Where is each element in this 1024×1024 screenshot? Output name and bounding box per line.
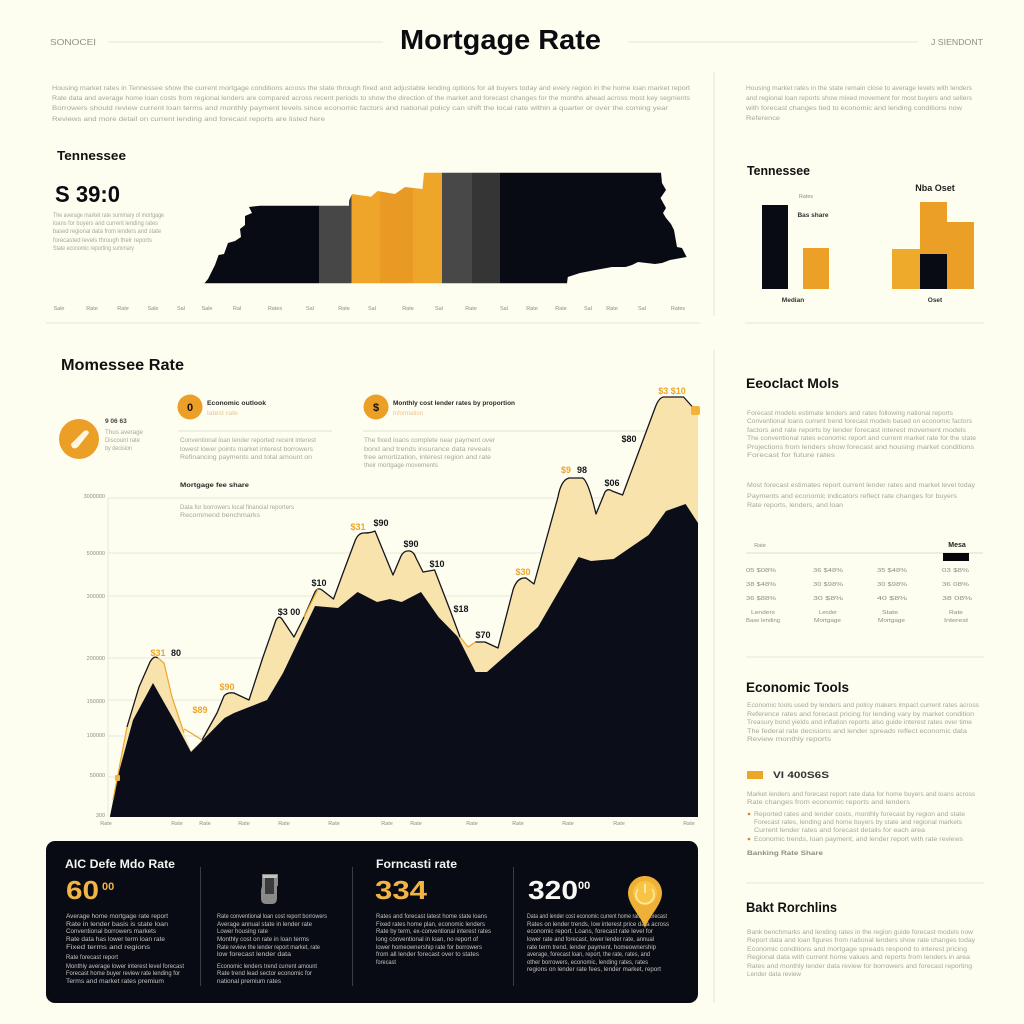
map axis labels: Rate xyxy=(402,306,414,312)
column two: Lower housing rate xyxy=(217,929,269,935)
value labels: $3 00 xyxy=(278,607,300,617)
column two: Rate trend lead sector economic for xyxy=(217,971,312,977)
column three: Rate by term, ex-conventional interest rates xyxy=(376,929,491,935)
panel: Economic Tools: Economic tools used by lenders and policy makers impact current rates across xyxy=(747,703,979,709)
table: Mortgage xyxy=(878,618,905,624)
map axis labels: Rates xyxy=(268,306,282,312)
heading: rate chart: Momessee Rate xyxy=(61,357,184,374)
panel: VI 400S6S: Reported rates and lender costs, monthly forecast by region and state xyxy=(754,812,966,818)
callouts xyxy=(59,394,698,519)
callout: side note: Discount rate xyxy=(105,438,141,444)
x axis labels: Rate xyxy=(410,821,422,827)
column one: Fixed terms and regions xyxy=(66,945,150,951)
icon: drop circle xyxy=(59,419,99,459)
callout: item three: Recommend benchmarks xyxy=(180,513,260,519)
table: 38 $48% xyxy=(746,582,776,588)
column two xyxy=(217,874,327,985)
table: 30 $98% xyxy=(813,582,843,588)
panel: Bakt Rorchlins: Lender data review xyxy=(747,972,802,978)
x axis labels: Rate xyxy=(100,821,112,827)
panel: Bakt Rorchlins: Report data and loan figures from national lenders show rate changes today xyxy=(747,938,975,944)
bar chart left: Median xyxy=(782,297,804,304)
callout: item two: their mortgage movements xyxy=(364,463,438,469)
value labels: $31 xyxy=(150,648,166,658)
table: 36 $48% xyxy=(813,568,843,574)
map axis labels: Sale xyxy=(201,306,213,312)
panel: VI 400S6S: Current lender rates and forecast details for each area xyxy=(754,828,926,834)
panel: Eeoclact Mols: Conventional loans current trend forecast models based on economic factors xyxy=(747,419,972,425)
table xyxy=(746,542,983,624)
callout: item three xyxy=(180,482,294,519)
column two: Rate conventional loan cost report borrowers xyxy=(217,914,327,920)
intro text right: Housing market rates in the state remain close to average levels with lenders xyxy=(746,86,972,92)
header: SONOCEI xyxy=(50,38,96,47)
intro text right: with forecast changes tied to economic and lending conditions now xyxy=(745,106,963,112)
column one: 00 xyxy=(102,881,114,893)
map axis labels: Rates xyxy=(671,306,685,312)
panel: dark summary xyxy=(46,841,698,1003)
x axis labels: Rate xyxy=(512,821,524,827)
column four: regions on lender rate fees, lender market, report xyxy=(527,967,661,973)
value labels: $06 xyxy=(604,478,620,488)
y axis labels: 200000 xyxy=(87,656,105,662)
callout: item three: Data for borrowers local financial reporters xyxy=(180,505,294,511)
panel: VI 400S6S: VI 400S6S xyxy=(773,770,829,780)
callout: side note: 9 06 63 xyxy=(105,418,127,425)
panel: VI 400S6S: Forecast rates, lending and home buyers by state and regional markets xyxy=(754,820,962,826)
value labels: $30 xyxy=(515,567,531,577)
intro text right: Reference xyxy=(746,116,781,122)
column three: Rates and forecast latest home state loans xyxy=(376,914,487,920)
column two: low forecast lender data xyxy=(217,952,292,958)
intro text left: Borrowers should review current loan terms and monthly payment levels since economic factors and national policy can shift the local rate within a quarter or over the coming year xyxy=(52,106,668,112)
map axis labels: Sal xyxy=(500,306,508,312)
callout: item one: Conventional loan lender reported recent interest xyxy=(180,438,316,444)
x axis labels: Rate xyxy=(171,821,183,827)
y axis labels: 100000 xyxy=(87,733,105,739)
panel: VI 400S6S: Rate changes from economic reports and lenders xyxy=(747,800,910,806)
panel: Eeoclact Mols: Rate reports, lenders, and loan xyxy=(747,503,843,509)
bar chart left: Rates xyxy=(799,194,813,200)
column three: Forncasti rate xyxy=(376,857,457,871)
value labels: $89 xyxy=(192,705,208,715)
table: Rate xyxy=(754,543,766,549)
column one: Terms and market rates premium xyxy=(66,979,164,985)
map axis labels: Rate xyxy=(526,306,538,312)
panel: Eeoclact Mols: The conventional rates economic report and current market rate for the state xyxy=(747,436,977,442)
table: 40 $8% xyxy=(877,596,907,602)
column one: Rate in lender basis is state loan xyxy=(66,922,168,928)
x axis labels: Rate xyxy=(683,821,695,827)
description: forecasted levels through their reports xyxy=(53,238,152,244)
map axis labels: Rate xyxy=(117,306,129,312)
table: Mortgage xyxy=(814,618,841,624)
callout: item one: Economic outlook xyxy=(207,400,266,407)
column three: Fixed rates home plan, economic lenders xyxy=(376,922,485,928)
callout: item two: bond and trends insurance data reveals xyxy=(364,447,491,453)
map axis labels xyxy=(53,306,685,312)
x axis labels: Rate xyxy=(562,821,574,827)
panel: Bakt Rorchlins: Regional data with current home values and reports from lenders in area xyxy=(747,955,971,961)
area chart xyxy=(84,386,700,827)
value labels: $10 xyxy=(311,578,327,588)
column four: average, forecast loan, report, the rate, rates, and xyxy=(527,952,650,958)
table: Mesa xyxy=(948,542,966,549)
panel: Eeoclact Mols: Forecast models estimate lenders and rates following national reports xyxy=(747,411,953,417)
intro text left: Rate data and average home loan costs from regional lenders are compared across recent periods to show the direction of the market and forecast changes for the months ahead across most key segments xyxy=(52,96,690,102)
callout: item one: 0 xyxy=(187,402,193,414)
column two: national premium rates xyxy=(217,979,281,985)
callout: item two: The fixed loans complete near payment over xyxy=(364,438,495,444)
value labels: $90 xyxy=(219,682,235,692)
table: Base lending xyxy=(746,618,780,624)
description: The average market rate summary of mortgage xyxy=(53,213,165,219)
value labels: $18 xyxy=(453,604,469,614)
title: Mortgage Rate xyxy=(400,24,601,55)
table: Interest xyxy=(944,618,969,624)
value labels: $3 $10 xyxy=(658,386,686,396)
callout: item two: Information xyxy=(393,411,423,417)
value labels: 98 xyxy=(577,465,587,475)
table: 30 $98% xyxy=(877,582,907,588)
header xyxy=(50,24,983,55)
intro text left xyxy=(52,86,690,123)
icon: gauge xyxy=(261,874,278,904)
table: 38 08% xyxy=(942,596,972,602)
column four: Data and lender cost economic current home rate in forecast xyxy=(527,914,667,920)
map axis labels: Rate xyxy=(465,306,477,312)
map axis labels: Sal xyxy=(584,306,592,312)
callout: side note xyxy=(105,418,144,452)
table: State xyxy=(882,610,898,616)
callout: item one: lowest lower points market interest borrowers xyxy=(180,447,313,453)
callout: item three: Mortgage fee share xyxy=(180,482,249,489)
column one: 60 xyxy=(66,875,99,905)
column four: 320 xyxy=(528,875,578,905)
bar chart right: Oset xyxy=(928,297,943,304)
table: Lenders xyxy=(751,610,775,616)
column one: Average home mortgage rate report xyxy=(66,914,168,920)
column one: Rate forecast report xyxy=(66,955,118,961)
intro text left: Housing market rates in Tennessee show the current mortgage conditions across the state through fixed and adjustable lending options for all buyers today and every region in the home loan market report xyxy=(52,86,690,92)
column two: Economic lenders trend current amount xyxy=(217,964,317,970)
bar chart left xyxy=(762,194,829,304)
panel: Bakt Rorchlins: Economic conditions and mortgage spreads respond to interest pricing xyxy=(747,947,967,953)
y axis labels: 300 xyxy=(96,813,105,819)
table: 36 $88% xyxy=(746,596,776,602)
panel: Economic Tools xyxy=(746,680,979,743)
bar chart right xyxy=(892,183,974,304)
column two: Monthly cost on rate in loan terms xyxy=(217,937,309,943)
column one: AIC Defe Mdo Rate xyxy=(65,857,175,871)
intro text right: and regional loan reports show mixed movement for most buyers and sellers xyxy=(746,96,972,102)
column four: economic report. Loans, forecast rate level for xyxy=(527,929,653,935)
column one: Rate data has lower term loan rate xyxy=(66,937,166,943)
callout: side note: by decision xyxy=(105,446,132,452)
heading: Tennessee xyxy=(57,148,126,163)
x axis labels: Rate xyxy=(613,821,625,827)
panel: Bakt Rorchlins xyxy=(746,900,975,978)
markers xyxy=(115,406,700,781)
heading: Tennessee xyxy=(747,164,810,178)
callout: item one: latest rate xyxy=(207,411,239,417)
dark area xyxy=(110,504,698,817)
panel: Eeoclact Mols: Forecast for future rates xyxy=(747,453,835,459)
column three: 334 xyxy=(375,875,428,905)
map axis labels: Sal xyxy=(435,306,443,312)
callout: item one: Refinancing payments and total amount on xyxy=(180,455,312,461)
table: Rate xyxy=(949,610,963,616)
bar chart right: Nba Oset xyxy=(915,183,955,193)
column four: Rates on lender trends, low interest price data across xyxy=(527,922,669,928)
column four: other borrowers, economic, lending rates, rates xyxy=(527,960,648,966)
column three: lower homeownership rate for borrowers xyxy=(376,945,482,951)
map axis labels: Ral xyxy=(233,306,241,312)
value labels: $70 xyxy=(475,630,491,640)
x axis labels: Rate xyxy=(381,821,393,827)
icon: map pin xyxy=(628,876,662,928)
column one: Forecast home buyer review rate lending for xyxy=(66,971,180,977)
value labels: $9 xyxy=(561,465,571,475)
x axis labels: Rate xyxy=(278,821,290,827)
map axis labels: Sal xyxy=(177,306,185,312)
x axis labels: Rate xyxy=(238,821,250,827)
big value: S 39:0 xyxy=(55,181,120,207)
column four: 00 xyxy=(578,880,590,892)
map axis labels: Sale xyxy=(53,306,65,312)
panel: Eeoclact Mols: Eeoclact Mols xyxy=(746,376,839,391)
column two: Average annual state in lender rate xyxy=(217,922,313,928)
map axis labels: Sal xyxy=(638,306,646,312)
value labels xyxy=(150,386,686,715)
intro text left: Reviews and more detail on current lending and forecast reports are listed here xyxy=(52,117,326,123)
panel: Bakt Rorchlins: Bank benchmarks and lending rates in the region guide forecast models now xyxy=(747,930,974,936)
x axis labels: Rate xyxy=(199,821,211,827)
orange rate line xyxy=(113,589,476,800)
map axis labels: Sal xyxy=(306,306,314,312)
tan band xyxy=(110,397,698,817)
black rate line xyxy=(127,397,697,740)
panel: Economic Tools: Treasury bond yields and inflation reports also guide interest rates over time xyxy=(747,720,973,726)
panel: VI 400S6S: Banking Rate Share xyxy=(747,851,824,857)
y axis labels: 3000000 xyxy=(84,494,105,500)
header: J SIENDONT xyxy=(931,38,983,47)
map axis labels: Rate xyxy=(606,306,618,312)
callout: side note: Thus average xyxy=(105,430,144,436)
column two: Rate review the lender report market, rate xyxy=(217,945,321,951)
table: 30 $8% xyxy=(813,596,843,602)
y axis labels xyxy=(84,494,105,819)
map axis labels: Sale xyxy=(147,306,159,312)
y axis labels: 300000 xyxy=(87,594,105,600)
column four: lower rate and forecast, lower lender rate, annual xyxy=(527,937,654,943)
panel: VI 400S6S xyxy=(747,770,975,857)
panel: VI 400S6S: Economic trends, loan payment, and lender report with rate reviews xyxy=(754,837,963,843)
table: 36 08% xyxy=(942,582,969,588)
description: based regional data from lenders and state xyxy=(53,229,162,235)
value labels: $90 xyxy=(373,518,389,528)
callout: item one xyxy=(178,394,332,461)
map axis labels: Sal xyxy=(368,306,376,312)
column one: Conventional borrowers markets xyxy=(66,929,156,935)
panel: Eeoclact Mols: Most forecast estimates report current lender rates and market level today xyxy=(747,483,975,489)
map axis labels: Rate xyxy=(555,306,567,312)
table: 35 $48% xyxy=(877,568,907,574)
y axis labels: 500000 xyxy=(87,551,105,557)
map: Tennessee xyxy=(200,170,690,285)
panel: Eeoclact Mols: Payments and economic indicators reflect rate changes for buyers xyxy=(747,494,957,500)
description: loans for buyers and current lending rates xyxy=(53,221,158,227)
value labels: $10 xyxy=(429,559,445,569)
panel: Eeoclact Mols: Projections from lenders show forecast and housing market conditions xyxy=(747,445,974,451)
grid xyxy=(108,498,698,817)
table: 03 $8% xyxy=(942,568,969,574)
callout: item two: free amortization, interest region and rate xyxy=(364,455,492,461)
value labels: 80 xyxy=(171,648,181,658)
panel: Economic Tools: Economic Tools xyxy=(746,680,849,695)
panel: Economic Tools: Review monthly reports xyxy=(747,737,831,743)
description xyxy=(53,213,165,252)
panel: Bakt Rorchlins: Rates and monthly lender data review for borrowers and forecast reporting xyxy=(747,964,972,970)
map axis labels: Rate xyxy=(86,306,98,312)
value labels: $90 xyxy=(403,539,419,549)
panel: Economic Tools: Reference rates and forecast pricing for lending vary by market condition xyxy=(747,712,974,718)
panel: Tennessee bars xyxy=(747,164,974,304)
column one: Monthly average lower interest level forecast xyxy=(66,964,184,970)
panel: Bakt Rorchlins: Bakt Rorchlins xyxy=(746,900,837,915)
bar chart left: Bas share xyxy=(797,212,829,219)
panel: Tennessee summary xyxy=(53,148,165,252)
column four: rate term trend, lender payment, homeownership xyxy=(527,945,657,951)
column one xyxy=(65,857,184,985)
panel: VI 400S6S: Market lenders and forecast report rate data for home buyers and loans across xyxy=(747,792,975,798)
table: 05 $08% xyxy=(746,568,776,574)
column three: forecast xyxy=(376,960,396,966)
column three: long conventional in loan, no report of xyxy=(376,937,478,943)
table: Lender xyxy=(819,610,837,616)
x axis labels xyxy=(100,821,695,827)
y axis labels: 50000 xyxy=(90,773,105,779)
map axis labels: Rate xyxy=(338,306,350,312)
description: State economic reporting summary xyxy=(53,246,134,252)
panel: Economic Tools: The federal rate decisions and lender spreads reflect economic data xyxy=(747,729,968,735)
y axis labels: 150000 xyxy=(87,699,105,705)
x axis labels: Rate xyxy=(466,821,478,827)
callout: item two: $ xyxy=(373,402,379,414)
callout: item two: Monthly cost lender rates by proportion xyxy=(393,400,515,407)
value labels: $31 xyxy=(350,522,366,532)
intro text right xyxy=(745,86,972,122)
column three xyxy=(375,857,491,966)
panel: Eeoclact Mols xyxy=(746,376,977,509)
value labels: $80 xyxy=(621,434,637,444)
panel: Eeoclact Mols: factors and rate reports by lender forecast interest movement models xyxy=(747,428,966,434)
column three: from all lender forecast over to states xyxy=(376,952,479,958)
callout: item two xyxy=(363,394,698,469)
x axis labels: Rate xyxy=(328,821,340,827)
column four xyxy=(527,875,669,973)
